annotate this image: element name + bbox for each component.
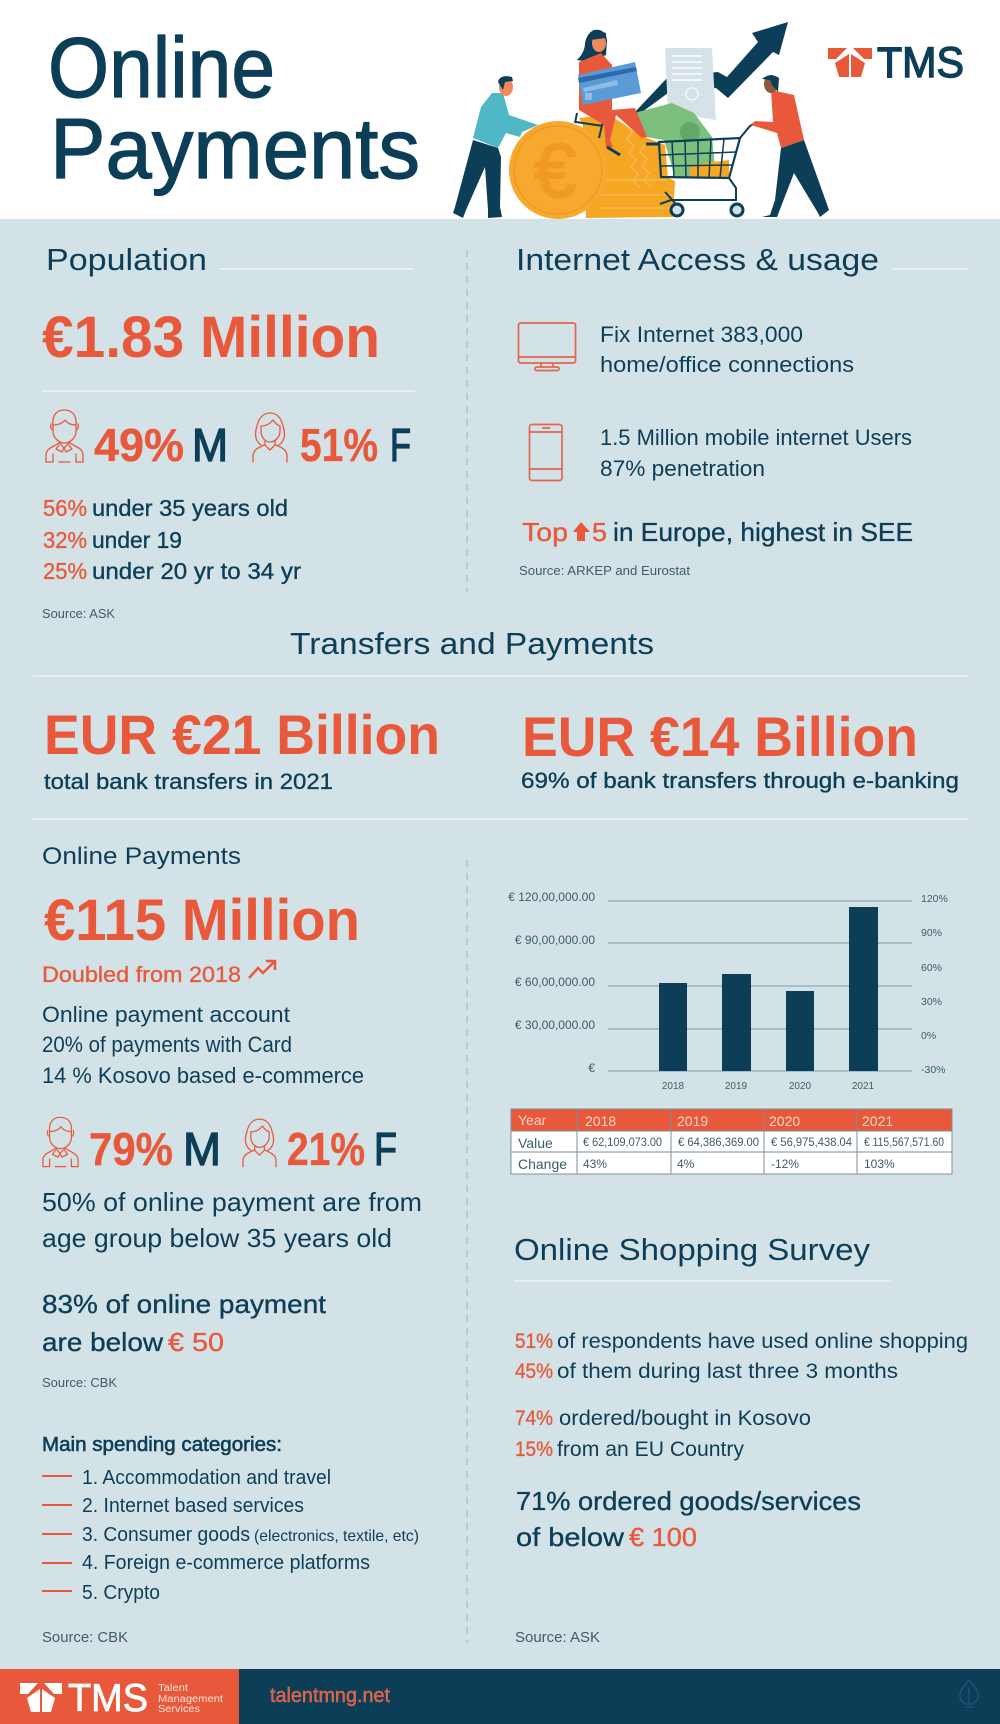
large euro coin: € [534, 129, 576, 214]
ranking callout: Top [522, 517, 568, 547]
payment size fact [42, 1289, 327, 1357]
age breakdown: 32% [43, 527, 87, 553]
left axis labels [508, 890, 595, 1075]
left axis labels: € 90,00,000.00 [515, 933, 595, 947]
panel: transfers and payments [33, 626, 968, 819]
female share: 51% [300, 419, 378, 471]
spending categories list: 5. Crypto [82, 1582, 160, 1604]
right axis labels: 60% [921, 962, 942, 974]
online payments figure: €115 Million [44, 888, 360, 953]
spending categories list: 4. Foreign e-commerce platforms [82, 1552, 370, 1574]
receipt [665, 48, 716, 120]
table header: 2021 [862, 1113, 893, 1129]
mobile internet text: 1.5 Million mobile internet Users [600, 425, 912, 450]
header band [0, 0, 1000, 219]
age group fact: age group below 35 years old [42, 1223, 392, 1253]
table row: change: Change [518, 1156, 567, 1172]
age group fact [42, 1187, 422, 1253]
table row: value: € 64,386,369.00 [678, 1135, 759, 1149]
icon: monitor [518, 323, 576, 370]
survey facts: usage: of them during last three 3 months [557, 1360, 898, 1383]
table row: value: € 115,567,571.60 [864, 1135, 944, 1149]
mobile internet text: 87% penetration [600, 456, 765, 481]
right axis labels: 120% [921, 893, 948, 905]
source: Source: ASK [515, 1629, 600, 1646]
right axis labels [921, 893, 948, 1076]
left axis labels: € 120,00,000.00 [508, 890, 595, 904]
table row: value [518, 1135, 944, 1151]
spending categories list: Main spending categories: [42, 1434, 282, 1456]
spending categories list: (electronics, textile, etc) [254, 1528, 419, 1545]
table row: change: 4% [677, 1157, 695, 1171]
year labels [662, 1081, 875, 1092]
survey callout: of below [516, 1522, 624, 1552]
year labels: 2020 [789, 1081, 812, 1092]
source: Source: ARKEP and Eurostat [519, 563, 690, 578]
source: Source: ASK [42, 606, 115, 621]
year labels: 2021 [852, 1081, 875, 1092]
e-banking stat: 69% of bank transfers through e-banking [521, 768, 959, 793]
age breakdown: under 20 yr to 34 yr [92, 558, 301, 584]
male share [94, 419, 228, 471]
spending categories list: 3. Consumer goods [82, 1524, 250, 1546]
banknotes [629, 103, 716, 177]
male share: M [192, 419, 228, 471]
age group fact: 50% of online payment are from [42, 1187, 422, 1217]
large euro coin [509, 121, 607, 219]
female share: 21% [287, 1123, 365, 1175]
footer [0, 1669, 1000, 1724]
title: Online [48, 21, 275, 116]
payment facts: 14 % Kosovo based e-commerce [42, 1063, 364, 1088]
e-banking stat: EUR €14 Billion [522, 705, 918, 768]
footer logo [20, 1677, 223, 1720]
bar chart: online payment value by year [508, 890, 948, 1092]
icon: man [43, 1117, 78, 1167]
survey callout: € 100 [629, 1522, 697, 1552]
right axis labels: -30% [921, 1064, 946, 1076]
table row: change [518, 1156, 895, 1172]
spending categories list: 2. Internet based services [82, 1495, 304, 1517]
survey callout: 71% ordered goods/services [516, 1486, 861, 1516]
ranking callout: in Europe, highest in SEE [613, 517, 913, 547]
age breakdown [43, 495, 301, 584]
age breakdown: 25% [43, 558, 87, 584]
female share: F [374, 1123, 397, 1175]
panel: online shopping survey [514, 1232, 968, 1646]
survey facts: origin: from an EU Country [557, 1438, 744, 1461]
payment size fact: 83% of online payment [42, 1289, 327, 1319]
payment size fact: are below [42, 1327, 163, 1357]
table row: value: € 56,975,438.04 [771, 1135, 852, 1149]
survey facts: usage: of respondents have used online shopping [557, 1330, 968, 1353]
heading: transfers and payments: Transfers and Payments [290, 626, 654, 661]
title [48, 21, 420, 197]
age breakdown: under 19 [92, 527, 182, 553]
left man [453, 76, 538, 218]
total transfers stat: total bank transfers in 2021 [44, 769, 333, 794]
table header: 2018 [585, 1113, 616, 1129]
footer logo: Services [158, 1703, 200, 1715]
table row: value: Value [518, 1135, 553, 1151]
payment facts: 20% of payments with Card [42, 1032, 292, 1057]
right axis labels: 30% [921, 996, 942, 1008]
survey facts: origin: 74% [515, 1407, 553, 1430]
rising arrow [634, 22, 788, 115]
bars [659, 907, 878, 1071]
survey callout [516, 1486, 861, 1552]
survey facts: origin: ordered/bought in Kosovo [559, 1407, 811, 1430]
table header [518, 1112, 893, 1129]
icon: phone [530, 424, 562, 480]
payment facts: Online payment account [42, 1002, 290, 1027]
icon: woman [253, 413, 287, 462]
panel: population [42, 242, 415, 621]
heading: online payments: Online Payments [42, 843, 241, 870]
male share: M [183, 1123, 221, 1175]
icon: woman [243, 1119, 276, 1167]
heading: survey: Online Shopping Survey [514, 1232, 871, 1267]
table row: change: 43% [583, 1157, 607, 1171]
table header: Year [518, 1112, 547, 1128]
stool [575, 113, 605, 138]
year labels: 2018 [662, 1081, 685, 1092]
age breakdown: 56% [43, 495, 87, 521]
panel: online payments [42, 843, 422, 1646]
survey facts: usage: 45% [515, 1360, 553, 1383]
survey facts: usage [515, 1330, 968, 1383]
footer logo: Management [158, 1693, 223, 1705]
table header: 2020 [769, 1113, 800, 1129]
payment size fact: € 50 [168, 1327, 224, 1357]
footer logo: TMS [68, 1677, 148, 1720]
source: Source: CBK [42, 1629, 128, 1646]
shopping cart [659, 123, 755, 216]
title: Payments [50, 102, 420, 197]
icon: man [46, 410, 83, 462]
table row: change: 103% [864, 1157, 895, 1171]
heading: population: Population [46, 242, 207, 277]
spending categories list [42, 1434, 419, 1604]
e-banking stat [521, 705, 959, 793]
left axis labels: € 60,00,000.00 [515, 975, 595, 989]
male share: 79% [89, 1123, 173, 1175]
growth note: Doubled from 2018 [42, 962, 241, 987]
survey facts: origin [515, 1407, 811, 1461]
woman with credit card [575, 30, 659, 155]
panel: internet access [516, 242, 969, 578]
data table [511, 1109, 952, 1174]
population figure: €1.83 Million [42, 305, 380, 370]
right axis labels: 90% [921, 927, 942, 939]
table row: change: -12% [771, 1157, 799, 1171]
fixed internet text: home/office connections [600, 352, 854, 377]
payment facts [42, 1002, 364, 1088]
survey facts: usage: 51% [515, 1330, 553, 1353]
source: Source: CBK [42, 1375, 117, 1390]
male share: 49% [94, 419, 184, 471]
ranking callout: 5 [592, 517, 607, 547]
right axis labels: 0% [921, 1030, 936, 1042]
logo: TMS [828, 39, 964, 87]
year labels: 2019 [725, 1081, 748, 1092]
right man [751, 75, 829, 217]
survey facts: origin: 15% [515, 1438, 553, 1461]
icon: footer mark [960, 1680, 978, 1707]
fixed internet text: Fix Internet 383,000 [600, 322, 803, 347]
total transfers stat: EUR €21 Billion [44, 703, 440, 766]
female share: F [390, 419, 411, 471]
left axis labels: € [588, 1061, 595, 1075]
website: talentmng.net [270, 1685, 390, 1707]
table header: 2019 [677, 1113, 708, 1129]
age breakdown: under 35 years old [92, 495, 288, 521]
spending categories list: 1. Accommodation and travel [82, 1467, 331, 1489]
male share [89, 1123, 221, 1175]
coin stack [579, 115, 675, 218]
mobile internet text [600, 425, 912, 481]
logo: TMS: TMS [877, 39, 964, 87]
fixed internet text [600, 322, 854, 377]
footer logo: Talent [158, 1682, 188, 1694]
table row: value: € 62,109,073.00 [583, 1135, 662, 1149]
total transfers stat [44, 703, 440, 794]
heading: internet access: Internet Access & usage [516, 242, 879, 277]
illustration: people with coins, card, cart and arrow [453, 22, 829, 219]
left axis labels: € 30,00,000.00 [515, 1018, 595, 1032]
